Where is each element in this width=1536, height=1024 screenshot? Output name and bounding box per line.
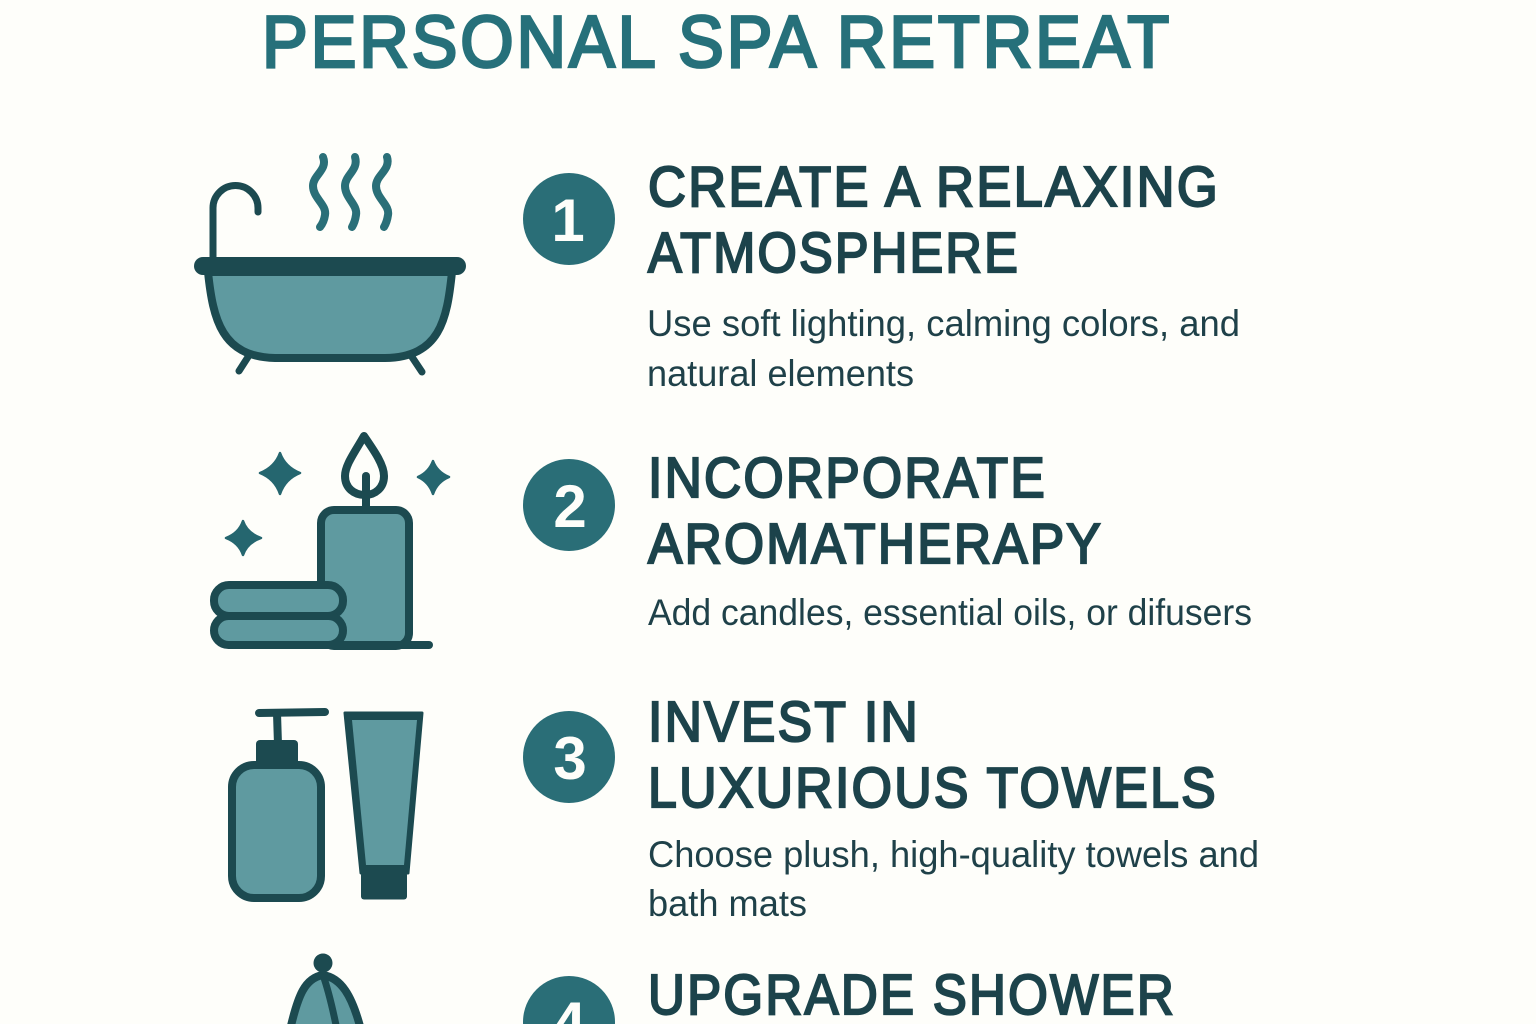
title: PERSONAL SPA RETREAT (262, 2, 1172, 83)
heading 3: INVEST IN (648, 690, 920, 754)
description 1 (647, 303, 1240, 394)
icon: pump bottle and tube (232, 712, 422, 900)
number badge 1: 1 (551, 187, 585, 254)
icon: bathtub with steam (194, 157, 466, 372)
step 2 panel (214, 436, 1252, 646)
heading 2: INCORPORATE (648, 446, 1047, 510)
description 3: Choose plush, high-quality towels and (648, 834, 1259, 875)
description 2: Add candles, essential oils, or difusers (648, 592, 1252, 633)
description 1: Use soft lighting, calming colors, and (647, 303, 1240, 344)
number badge 1 (523, 173, 615, 265)
description 3: bath mats (648, 883, 807, 924)
heading 3 (648, 690, 1218, 820)
heading 1: CREATE A RELAXING (648, 155, 1220, 219)
heading 1 (648, 155, 1220, 285)
description 1: natural elements (647, 353, 914, 394)
heading 3: LUXURIOUS TOWELS (648, 756, 1218, 820)
heading 2 (648, 446, 1103, 576)
number badge 2 (523, 459, 615, 551)
step 1 panel (194, 155, 1240, 394)
number badge 3 (523, 711, 615, 803)
step 3 panel (232, 690, 1259, 924)
icon: candle, towels and sparkles (214, 436, 449, 646)
heading 2: AROMATHERAPY (648, 512, 1103, 576)
heading 1: ATMOSPHERE (648, 221, 1020, 285)
number badge 2: 2 (553, 473, 587, 540)
number badge 4 (523, 976, 615, 1024)
icon: shower head (290, 954, 361, 1024)
description 3 (648, 834, 1259, 924)
step 4 panel (290, 954, 1176, 1024)
number badge 3: 3 (553, 725, 587, 792)
